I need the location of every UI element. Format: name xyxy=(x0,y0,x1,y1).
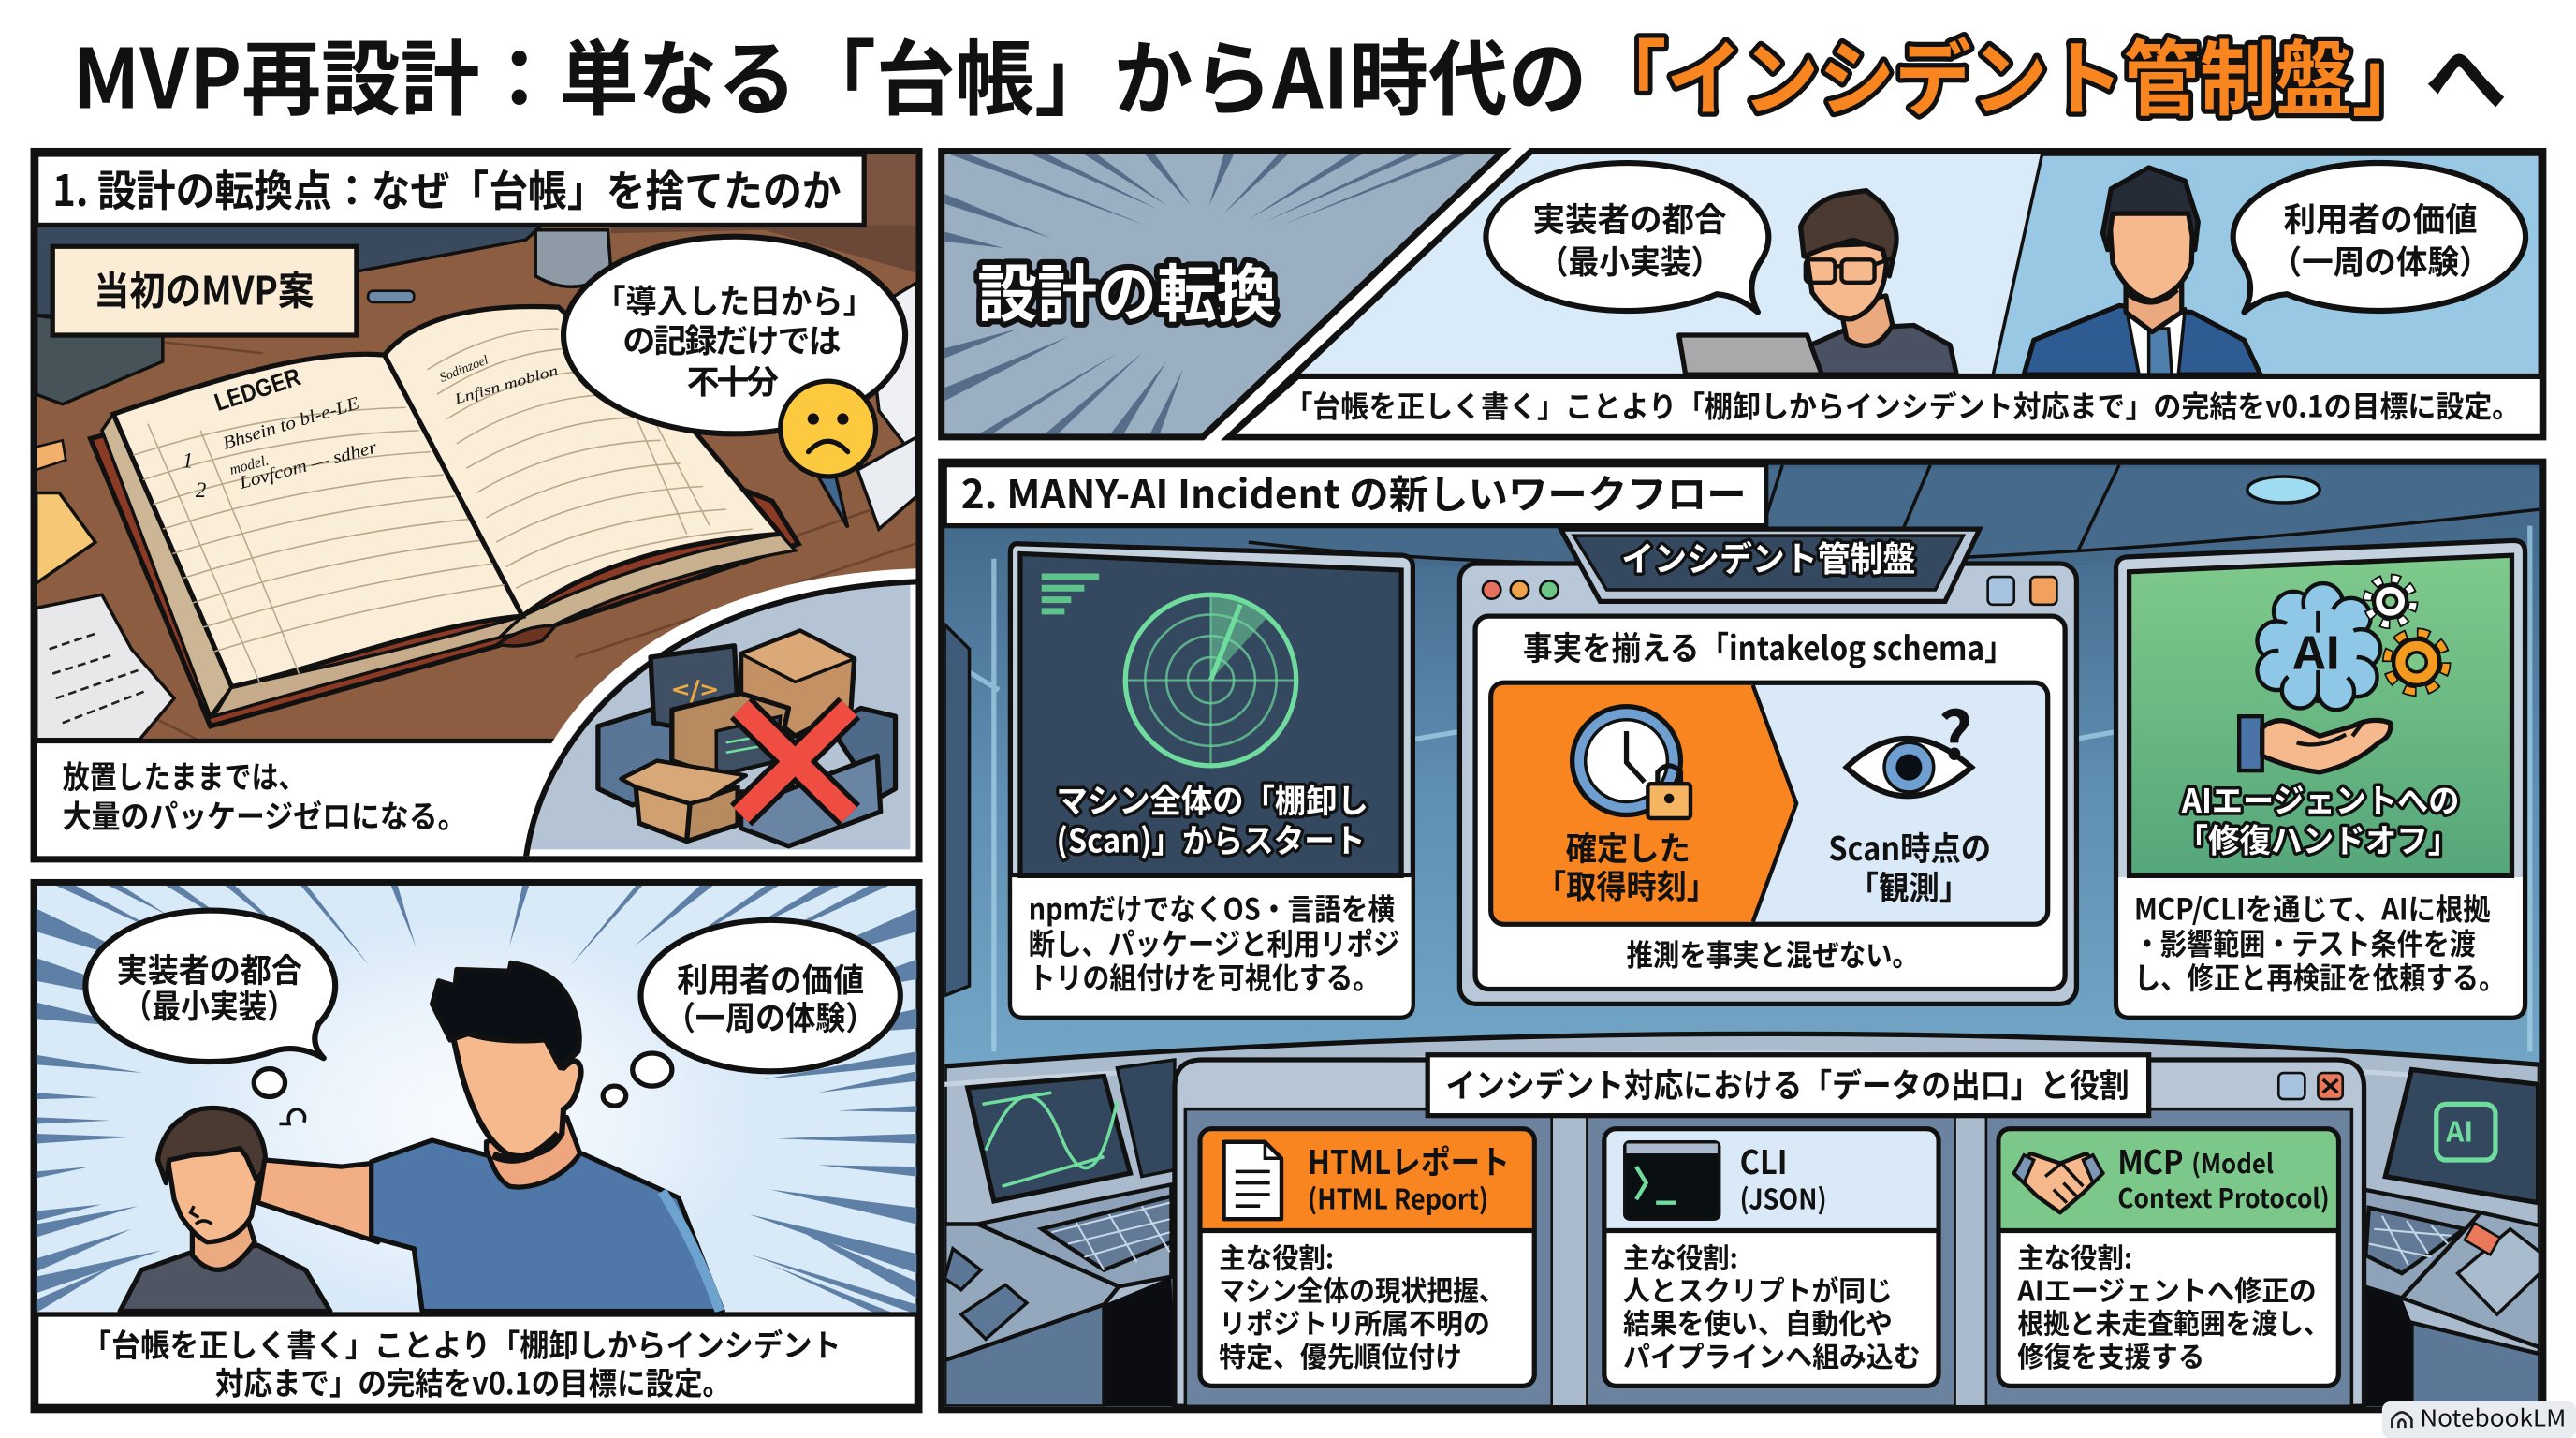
card: CLI: 人とスクリプトが同じ xyxy=(1623,1269,1893,1310)
card: MCP: 修復を支援する xyxy=(2017,1334,2204,1375)
speech bubble: not enough: 「導入した日から」 xyxy=(594,276,874,324)
split panel: fixed time vs observation: 確定した xyxy=(1566,823,1690,871)
character: big user xyxy=(258,962,723,1312)
icon: open hand xyxy=(2239,716,2391,772)
card: HTML report: 特定、優先順位付け xyxy=(1219,1334,1462,1375)
card heading: scan xyxy=(1057,775,1368,862)
window footer: 推測を事実と混ぜない。 xyxy=(1627,932,1919,976)
left console xyxy=(944,1060,1177,1406)
speech bubble: not enough xyxy=(564,237,905,433)
panel: implementer and user perspectives xyxy=(1229,151,2543,437)
inset: package pile xyxy=(520,575,916,859)
icon: terminal xyxy=(1625,1142,1720,1219)
card: scan inventory xyxy=(1010,544,1412,1017)
icon: radar xyxy=(1042,577,1296,766)
window: intakelog schema xyxy=(1459,564,2076,1004)
label: initial MVP: 当初のMVP案 xyxy=(94,259,314,316)
card body: scan: 断し、パッケージと利用リポジ xyxy=(1029,920,1399,963)
card body: scan: npmだけでなくOS・言語を横 xyxy=(1029,886,1395,929)
control room backdrop xyxy=(944,465,2539,1410)
card: MCP xyxy=(1998,1129,2338,1386)
caption: scope of v0.1: 対応まで」の完結をv0.1の目標に設定。 xyxy=(215,1357,731,1403)
icon: AI brain: AI xyxy=(2292,617,2341,682)
illustration: desk with ledger: Sodinzoel xyxy=(437,352,490,386)
illustration: desk with ledger: Bhsein to bl-e-LE xyxy=(221,393,361,454)
card: CLI: (JSON) xyxy=(1740,1176,1827,1217)
speech bubble: user value xyxy=(641,920,900,1071)
card body: handoff: し、修正と再検証を依頼する。 xyxy=(2134,955,2505,998)
speech bubble: implementer convenience xyxy=(1486,163,1768,312)
speech bubble: implementer convenience: 実装者の都合 xyxy=(1532,194,1727,242)
card heading: scan: (Scan)」からスタート xyxy=(1057,814,1365,862)
card: HTML report: 主な役割: xyxy=(1219,1236,1334,1277)
illustration: desk with ledger xyxy=(37,154,920,740)
card: CLI: 結果を使い、自動化や xyxy=(1623,1301,1893,1343)
label: initial MVP xyxy=(52,246,357,335)
split panel: fixed time vs observation xyxy=(1491,682,2048,924)
inset: package pile: </> xyxy=(672,672,718,706)
speech bubble: user value: （一周の体験） xyxy=(666,992,875,1040)
card: HTML report: マシン全体の現状把握、 xyxy=(1219,1269,1505,1310)
illustration: desk with ledger: Lnfisn moblon xyxy=(452,363,560,408)
icon: gears xyxy=(2367,579,2446,692)
caption: v0.1 goal xyxy=(1229,376,2543,437)
card: CLI xyxy=(1604,1129,1939,1386)
caption: v0.1 goal: 「台帳を正しく書く」ことより「棚卸しからインシデント対応まで」の完結をv0.1の目標に設定。 xyxy=(1284,383,2520,426)
card: CLI: 主な役割: xyxy=(1623,1236,1738,1277)
icon: eye with question mark: ? xyxy=(1939,684,1972,779)
watermark: NotebookLM xyxy=(2382,1401,2576,1438)
section heading 2: 2. MANY-AI Incident の新しいワークフロー xyxy=(961,463,1747,521)
watermark: NotebookLM: NotebookLM xyxy=(2420,1401,2566,1434)
card: HTML report: リポジトリ所属不明の xyxy=(1219,1301,1490,1343)
right console xyxy=(2363,1070,2539,1406)
illustration: desk with ledger: Lovfcom — sdher xyxy=(237,437,379,493)
card: HTML report xyxy=(1200,1129,1534,1386)
icon: eye with question mark xyxy=(1847,684,1972,796)
speech bubble: user value: 利用者の価値 xyxy=(2284,194,2478,242)
thought bubbles xyxy=(254,1053,672,1123)
card: CLI: パイプラインへ組み込む xyxy=(1623,1334,1921,1375)
card body: scan xyxy=(1029,886,1399,998)
icon: handshake xyxy=(2014,1153,2102,1212)
character: suit user xyxy=(2024,168,2261,374)
card: MCP: MCP xyxy=(2117,1137,2183,1184)
card: MCP: 根拠と未走査範囲を渡し、 xyxy=(2017,1301,2330,1343)
panel: design shift banner xyxy=(942,151,1503,437)
card heading: scan: マシン全体の「棚卸し xyxy=(1057,775,1368,823)
card body: handoff: ・影響範囲・テスト条件を渡 xyxy=(2134,920,2476,963)
card heading: handoff xyxy=(2176,775,2459,862)
title: へ xyxy=(2424,13,2507,132)
panel: new workflow xyxy=(942,462,2543,1410)
card body: handoff: MCP/CLIを通じて、AIに根拠 xyxy=(2134,886,2491,929)
character: developer with laptop xyxy=(1679,191,1956,374)
speech bubble: user value: 利用者の価値 xyxy=(677,954,864,1002)
speech bubble: implementer convenience: （最小実装） xyxy=(124,981,296,1029)
icon: AI brain xyxy=(2257,583,2380,710)
heading: design shift: 設計の転換 xyxy=(977,245,1277,335)
card: HTML report: HTMLレポート xyxy=(1308,1137,1510,1184)
card: HTML report: (HTML Report) xyxy=(1308,1176,1488,1217)
card: MCP: 主な役割: xyxy=(2017,1236,2132,1277)
card: CLI: CLI xyxy=(1740,1137,1788,1184)
speech bubble: user value xyxy=(2233,163,2525,312)
speech bubble: implementer convenience: 実装者の都合 xyxy=(117,945,302,992)
illustration: desk with ledger: 2 xyxy=(196,478,206,502)
split panel: fixed time vs observation: 「観測」 xyxy=(1848,862,1969,910)
speech bubble: not enough: の記録だけでは xyxy=(622,315,842,363)
illustration: desk with ledger: model. xyxy=(228,452,271,478)
card: AI agent handoff xyxy=(2116,540,2525,1017)
card body: scan: トリの組付けを可視化する。 xyxy=(1029,955,1380,998)
speech bubble: user value: （一周の体験） xyxy=(2271,236,2491,284)
caption: leaving it means zero packages: 大量のパッケージゼロになる。 xyxy=(63,791,466,837)
icon: sad face xyxy=(781,381,875,477)
speed lines and glow xyxy=(37,886,916,1314)
caption: leaving it means zero packages xyxy=(37,741,577,856)
title: MVP再設計：単なる「台帳」からAI時代の xyxy=(72,13,1587,132)
title xyxy=(72,13,2507,132)
title: 「インシデント管制盤」 xyxy=(1590,13,2428,132)
window title: インシデント対応における「データの出口」と役割 xyxy=(1445,1060,2130,1108)
section heading 1: 1. 設計の転換点：なぜ「台帳」を捨てたのか xyxy=(52,157,842,219)
character: small implementer xyxy=(120,1108,330,1312)
illustration: desk with ledger: LEDGER xyxy=(211,362,304,417)
right console: AI xyxy=(2445,1108,2473,1150)
card heading: handoff: AIエージェントへの xyxy=(2181,775,2459,823)
split panel: fixed time vs observation: Scan時点の xyxy=(1828,823,1991,871)
caption: scope of v0.1: 「台帳を正しく書く」ことより「棚卸しからインシデント xyxy=(82,1320,842,1366)
card body: handoff xyxy=(2134,886,2505,998)
caption: leaving it means zero packages: 放置したままでは、 xyxy=(63,752,305,798)
illustration: desk with ledger: 1 xyxy=(183,449,193,473)
icon: document xyxy=(1224,1142,1281,1219)
panel: implementer vs user comic xyxy=(34,882,919,1410)
speech bubble: not enough: 不十分 xyxy=(687,357,779,404)
speech bubble: implementer convenience: （最小実装） xyxy=(1538,236,1721,284)
badge: incident control board xyxy=(1560,529,1980,601)
card: MCP: Context Protocol) xyxy=(2117,1178,2330,1216)
speed lines xyxy=(944,154,1466,433)
card: MCP: (Model xyxy=(2191,1143,2274,1181)
split panel: fixed time vs observation: 「取得時刻」 xyxy=(1536,860,1717,908)
caption: scope of v0.1 xyxy=(37,1314,916,1406)
speech bubble: implementer convenience xyxy=(85,911,335,1062)
card heading: handoff: 「修復ハンドオフ」 xyxy=(2176,814,2459,862)
badge: incident control board: インシデント管制盤 xyxy=(1621,531,1915,581)
card: MCP: AIエージェントへ修正の xyxy=(2016,1269,2317,1310)
icon: clock with lock xyxy=(1573,707,1690,818)
window heading: 事実を揃える「intakelog schema」 xyxy=(1523,623,2014,670)
panel: design turning point xyxy=(34,151,920,859)
window: data outputs xyxy=(1175,1055,2364,1406)
